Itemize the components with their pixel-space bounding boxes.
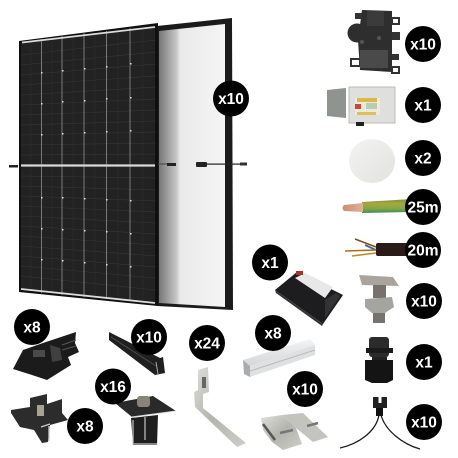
badge 20m: 20m bbox=[407, 242, 439, 260]
panel bus dots bbox=[41, 63, 132, 268]
badge 20m bbox=[405, 232, 441, 268]
badge x10 bolt bbox=[406, 283, 442, 319]
stainless clips bbox=[261, 413, 328, 450]
junction box bbox=[349, 139, 395, 183]
badge x1 box: x1 bbox=[414, 98, 432, 114]
badge 25m: 25m bbox=[407, 200, 439, 216]
solar panel, front view bbox=[9, 23, 158, 306]
badge x10 clips: x10 bbox=[292, 382, 318, 398]
electrical protection box bbox=[327, 87, 395, 126]
rail clamp with bolt bbox=[115, 396, 176, 445]
black mounting rail bbox=[109, 332, 165, 375]
badge x1 gateway: x1 bbox=[261, 255, 279, 272]
badge x10 panel: x10 bbox=[218, 91, 244, 108]
badge x10 panel bbox=[213, 80, 249, 116]
three-core cable bbox=[345, 239, 412, 256]
badge x10 clips bbox=[287, 371, 323, 407]
badge x8 rail: x8 bbox=[264, 326, 282, 342]
badge x10 microinverter bbox=[405, 26, 441, 62]
Y branch connector cable bbox=[340, 397, 420, 449]
badge x8 end clamp: x8 bbox=[23, 320, 41, 336]
panel cell grid bbox=[21, 30, 156, 300]
badge x8 mid clamp: x8 bbox=[76, 418, 94, 436]
badge x10 bolt: x10 bbox=[411, 294, 437, 310]
cable gland bbox=[365, 337, 393, 383]
steel rail bbox=[243, 339, 315, 377]
black end clamp bbox=[13, 332, 79, 380]
T-bolt bbox=[359, 275, 399, 323]
badge 25m bbox=[405, 189, 441, 225]
badge x8 rail bbox=[255, 315, 291, 351]
panel white bus lines bbox=[21, 27, 155, 303]
badge x16 clamp: x16 bbox=[100, 379, 126, 396]
badge x1 gateway bbox=[252, 244, 288, 280]
badge x24 hook: x24 bbox=[194, 336, 220, 352]
badge x10 connector: x10 bbox=[411, 414, 437, 432]
badge x1 gland bbox=[406, 344, 442, 380]
badge x2 junction: x2 bbox=[414, 150, 432, 168]
badge x10 black rail: x10 bbox=[136, 330, 162, 346]
badge x1 gland: x1 bbox=[415, 354, 433, 372]
badge x10 black rail bbox=[131, 319, 167, 355]
badge x2 junction bbox=[405, 140, 441, 176]
solar panel, rear view bbox=[157, 18, 247, 310]
badge x16 clamp bbox=[95, 368, 131, 404]
black mid clamp bbox=[11, 394, 68, 443]
badge x10 microinverter: x10 bbox=[410, 36, 436, 54]
communication gateway bbox=[275, 271, 343, 326]
roof hook bbox=[194, 367, 246, 447]
green-yellow earth cable bbox=[342, 199, 412, 213]
badge x10 connector bbox=[406, 404, 442, 440]
badge x8 end clamp bbox=[14, 309, 50, 345]
badge x8 mid clamp bbox=[67, 408, 103, 444]
microinverter bbox=[348, 10, 400, 73]
badge x1 box bbox=[405, 87, 441, 123]
badge x24 hook bbox=[189, 325, 225, 361]
